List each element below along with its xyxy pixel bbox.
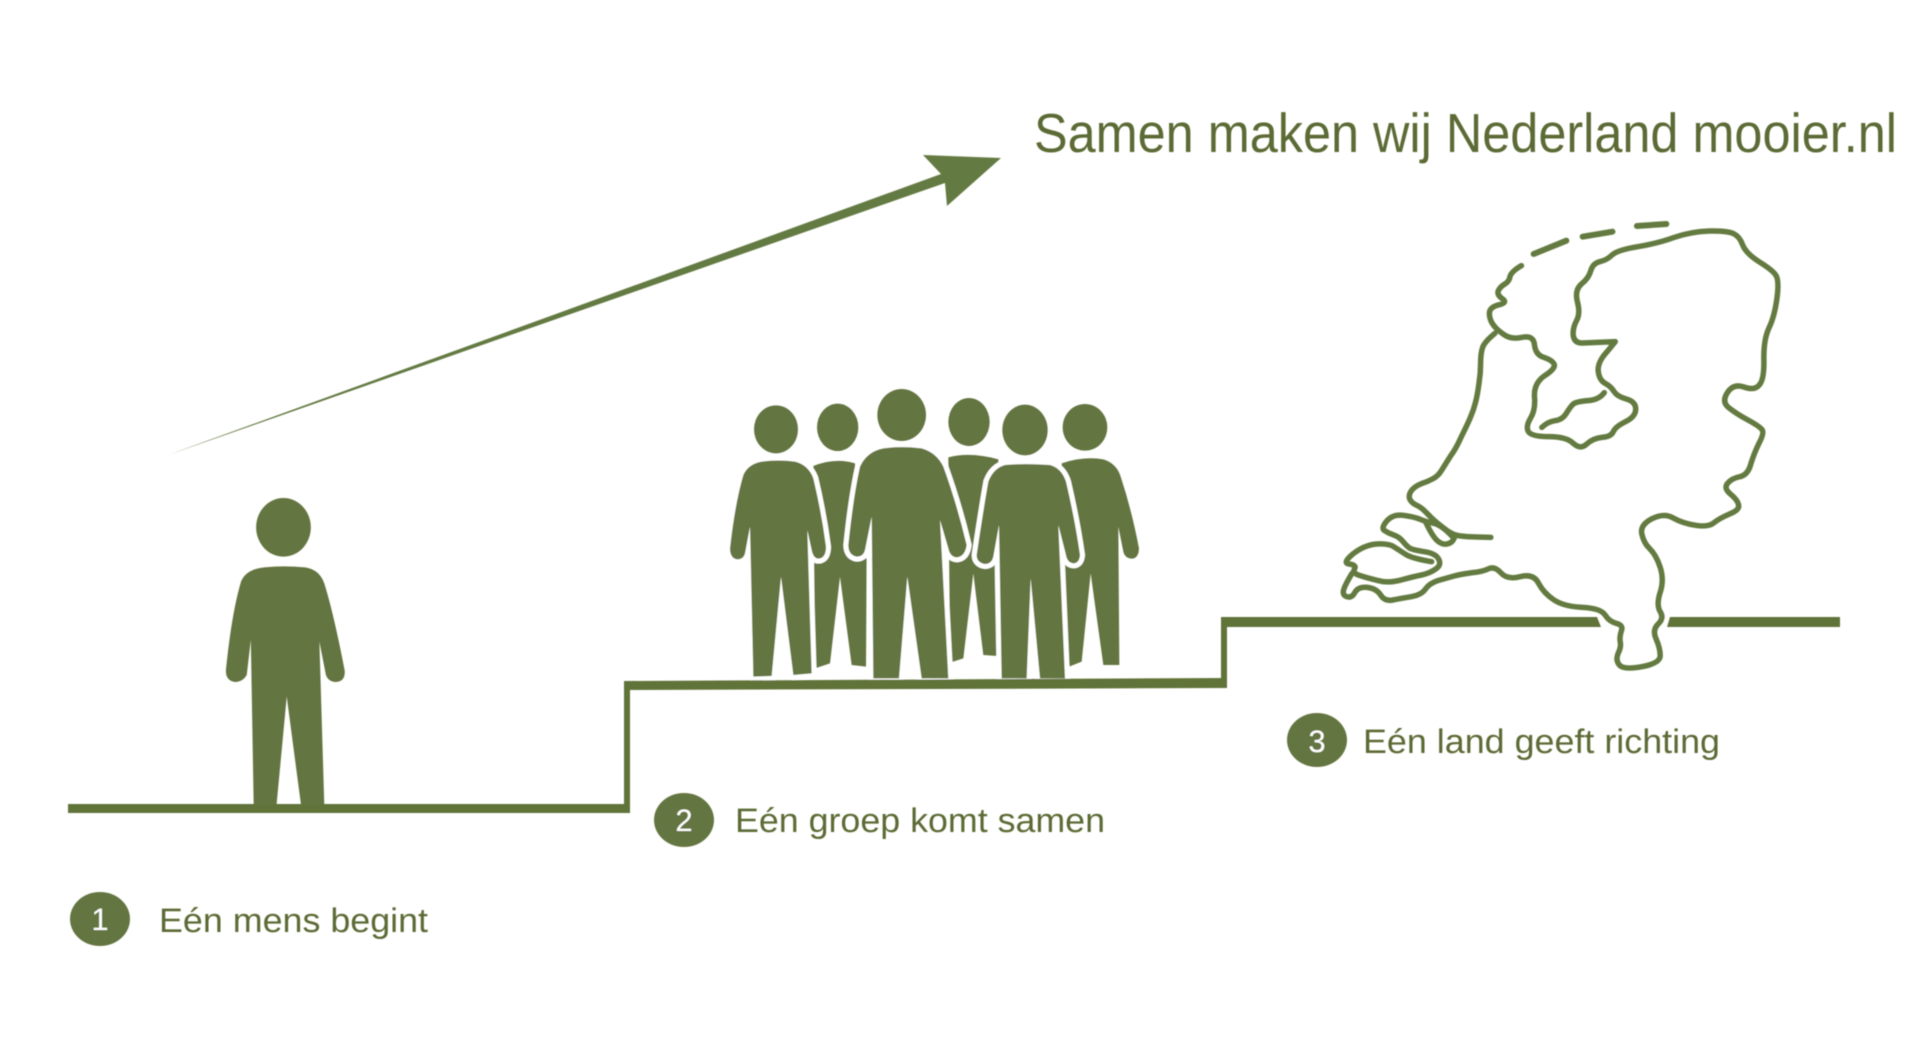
- person: front left: [730, 405, 826, 677]
- arrow: rising direction: [168, 155, 1001, 455]
- icon: group of six people: [730, 389, 1139, 678]
- person: back left: [813, 404, 867, 668]
- map: southwest islands: [1346, 515, 1454, 582]
- ground line under group: [624, 678, 1227, 690]
- map: north sea coast: [1409, 333, 1495, 537]
- step 1 label: [70, 892, 429, 946]
- step 3 number: 3: [1308, 724, 1326, 759]
- map: dashed Wadden islands: [1534, 224, 1666, 254]
- drawing: [68, 102, 1897, 946]
- stair line: [68, 617, 1840, 813]
- person: back middle: [948, 398, 1000, 663]
- step 2 text: Eén groep komt samen: [735, 802, 1105, 840]
- step 3 badge: [1287, 713, 1347, 767]
- map of the Netherlands: [1343, 224, 1778, 668]
- step 3 text: Eén land geeft richting: [1363, 723, 1720, 761]
- map: inner island channel: [1426, 522, 1454, 544]
- icon: single person: [226, 498, 345, 805]
- step 1 badge: [70, 892, 130, 946]
- step 1 text: Eén mens begint: [159, 902, 429, 940]
- map: mainland outline: [1343, 231, 1778, 668]
- step 2 number: 2: [675, 803, 693, 838]
- step 2 label: [654, 793, 1105, 847]
- person: front right: [977, 405, 1080, 678]
- person: front centre: [848, 389, 967, 678]
- person: back right: [1062, 404, 1139, 668]
- map: inner lake line: [1542, 393, 1604, 427]
- step 1 number: 1: [91, 902, 109, 937]
- step 2 badge: [654, 793, 714, 847]
- step 3 label: [1287, 713, 1720, 767]
